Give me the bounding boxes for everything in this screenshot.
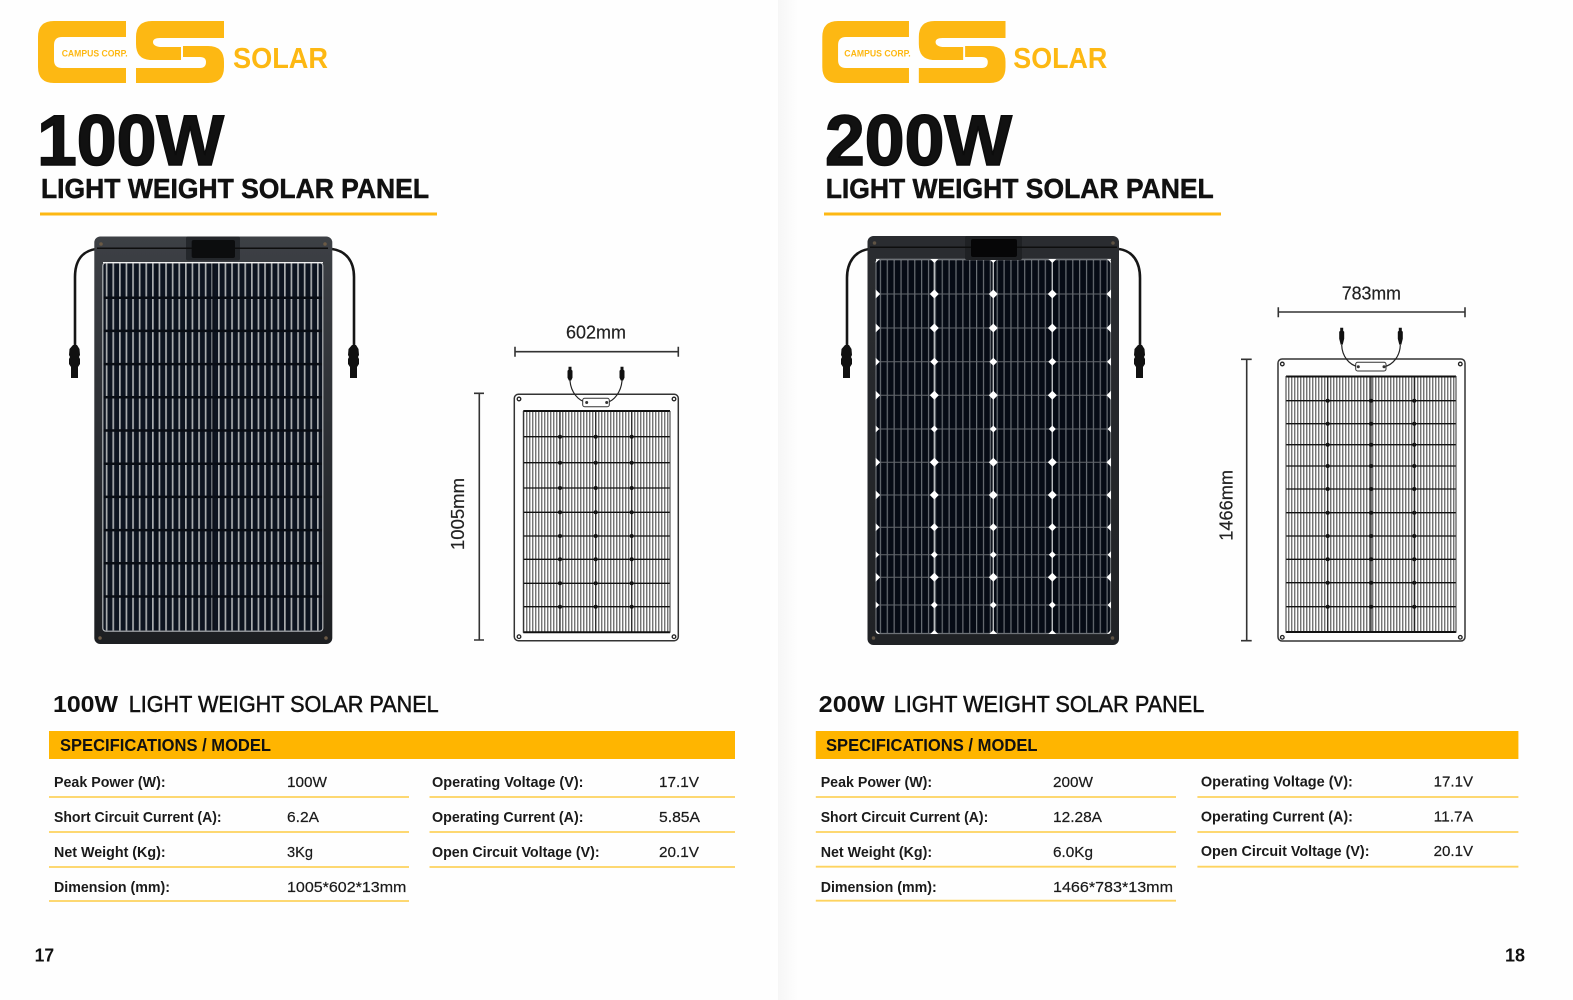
net weight: 6.0Kg	[1053, 844, 1093, 861]
logo: CS Campus Corp Solar	[822, 21, 1107, 83]
cables and connectors	[69, 249, 359, 378]
subtitle: LIGHT WEIGHT SOLAR PANEL	[826, 173, 1214, 204]
peak power	[54, 774, 328, 791]
outline panel	[514, 394, 678, 641]
net weight: Net Weight (Kg):	[54, 844, 166, 861]
solar cells	[102, 262, 323, 632]
junction box	[870, 236, 1117, 260]
mounting holes	[100, 244, 326, 638]
page: 100W	[35, 21, 735, 966]
net weight	[54, 844, 313, 861]
subtitle underline	[40, 212, 437, 216]
peak power	[821, 774, 1094, 791]
operating current: Operating Current (A):	[1201, 808, 1353, 826]
peak power: 100W	[287, 774, 328, 791]
short circuit current: 12.28A	[1053, 809, 1102, 826]
operating voltage: Operating Voltage (V):	[432, 774, 584, 791]
width label: 783mm	[1342, 283, 1401, 303]
net weight: 3Kg	[287, 844, 313, 861]
short circuit current: Short Circuit Current (A):	[54, 809, 222, 826]
operating voltage	[1201, 774, 1473, 790]
spec heading: LIGHT WEIGHT SOLAR PANEL	[894, 691, 1204, 717]
solar cells	[876, 259, 1111, 634]
table header bar	[49, 731, 735, 759]
operating current	[1201, 808, 1473, 826]
title: 100W: 100W	[37, 102, 224, 181]
operating voltage: 17.1V	[1434, 774, 1473, 790]
width dimension line	[1278, 307, 1465, 317]
dimension: 1005*602*13mm	[287, 879, 406, 896]
peak power: 200W	[1053, 774, 1094, 791]
dimension	[821, 879, 1173, 896]
spec heading: LIGHT WEIGHT SOLAR PANEL	[129, 691, 439, 717]
open circuit voltage	[1201, 843, 1473, 860]
short circuit current	[821, 809, 1102, 826]
operating current: Operating Current (A):	[432, 809, 584, 826]
short circuit current	[54, 809, 319, 826]
operating current	[432, 809, 700, 826]
height label: 1005mm	[448, 478, 468, 550]
width label: 602mm	[566, 322, 626, 342]
net weight: Net Weight (Kg):	[821, 844, 932, 861]
title: 200W: 200W	[825, 102, 1012, 181]
outline junction and cables	[1339, 328, 1403, 371]
spec heading: 100W	[53, 691, 118, 717]
page: 200W	[816, 21, 1525, 966]
operating current: 5.85A	[659, 809, 700, 826]
height dimension line	[474, 393, 484, 640]
operating voltage: 17.1V	[659, 774, 699, 791]
dimension: Dimension (mm):	[54, 879, 170, 896]
busbar joint diamonds	[871, 255, 1116, 638]
row rules	[816, 797, 1518, 901]
open circuit voltage: 20.1V	[1434, 843, 1473, 860]
product photo: 200W panel	[841, 236, 1145, 645]
operating voltage: Operating Voltage (V):	[1201, 774, 1353, 790]
peak power: Peak Power (W):	[54, 774, 166, 791]
short circuit current: 6.2A	[287, 809, 319, 826]
dimension: Dimension (mm):	[821, 879, 937, 896]
mounting holes	[874, 243, 1113, 638]
subtitle underline	[824, 212, 1221, 216]
page number 18: 18	[1505, 946, 1525, 966]
logo: CS Campus Corp Solar: CAMPUS CORP.	[62, 48, 128, 60]
subtitle: LIGHT WEIGHT SOLAR PANEL	[41, 173, 429, 204]
dimension diagram: 783 x 1466 mm	[1217, 283, 1465, 641]
spec heading: 200W	[819, 691, 885, 717]
logo: CS Campus Corp Solar	[38, 21, 328, 83]
page number 17: 17	[35, 946, 54, 966]
operating voltage	[432, 774, 699, 791]
width dimension line	[515, 347, 678, 357]
open circuit voltage	[432, 844, 699, 861]
table header bar	[816, 731, 1518, 759]
operating current: 11.7A	[1434, 808, 1473, 826]
table header bar: SPECIFICATIONS / MODEL	[60, 735, 271, 755]
junction box	[97, 236, 328, 260]
logo: CS Campus Corp Solar: SOLAR	[1013, 43, 1107, 75]
cables and connectors	[841, 249, 1145, 378]
product photo: 100W panel	[69, 236, 359, 644]
height label: 1466mm	[1217, 470, 1237, 541]
table header bar: SPECIFICATIONS / MODEL	[826, 735, 1038, 755]
spec table	[816, 731, 1518, 901]
outline panel	[1278, 359, 1465, 641]
peak power: Peak Power (W):	[821, 774, 932, 791]
dimension: 1466*783*13mm	[1053, 879, 1173, 896]
dimension diagram: 602 x 1005 mm	[448, 322, 678, 641]
panel frame	[94, 236, 332, 644]
dimension	[54, 879, 406, 896]
short circuit current: Short Circuit Current (A):	[821, 809, 988, 826]
height dimension line	[1241, 359, 1252, 641]
panel frame	[868, 236, 1119, 645]
open circuit voltage: Open Circuit Voltage (V):	[1201, 843, 1370, 860]
logo: CS Campus Corp Solar: CAMPUS CORP.	[844, 48, 911, 60]
row rules	[49, 797, 735, 901]
open circuit voltage: 20.1V	[659, 844, 699, 861]
open circuit voltage: Open Circuit Voltage (V):	[432, 844, 600, 861]
spec table	[49, 731, 735, 901]
net weight	[821, 844, 1093, 861]
logo: CS Campus Corp Solar: SOLAR	[233, 43, 328, 75]
outline junction and cables	[568, 367, 624, 407]
